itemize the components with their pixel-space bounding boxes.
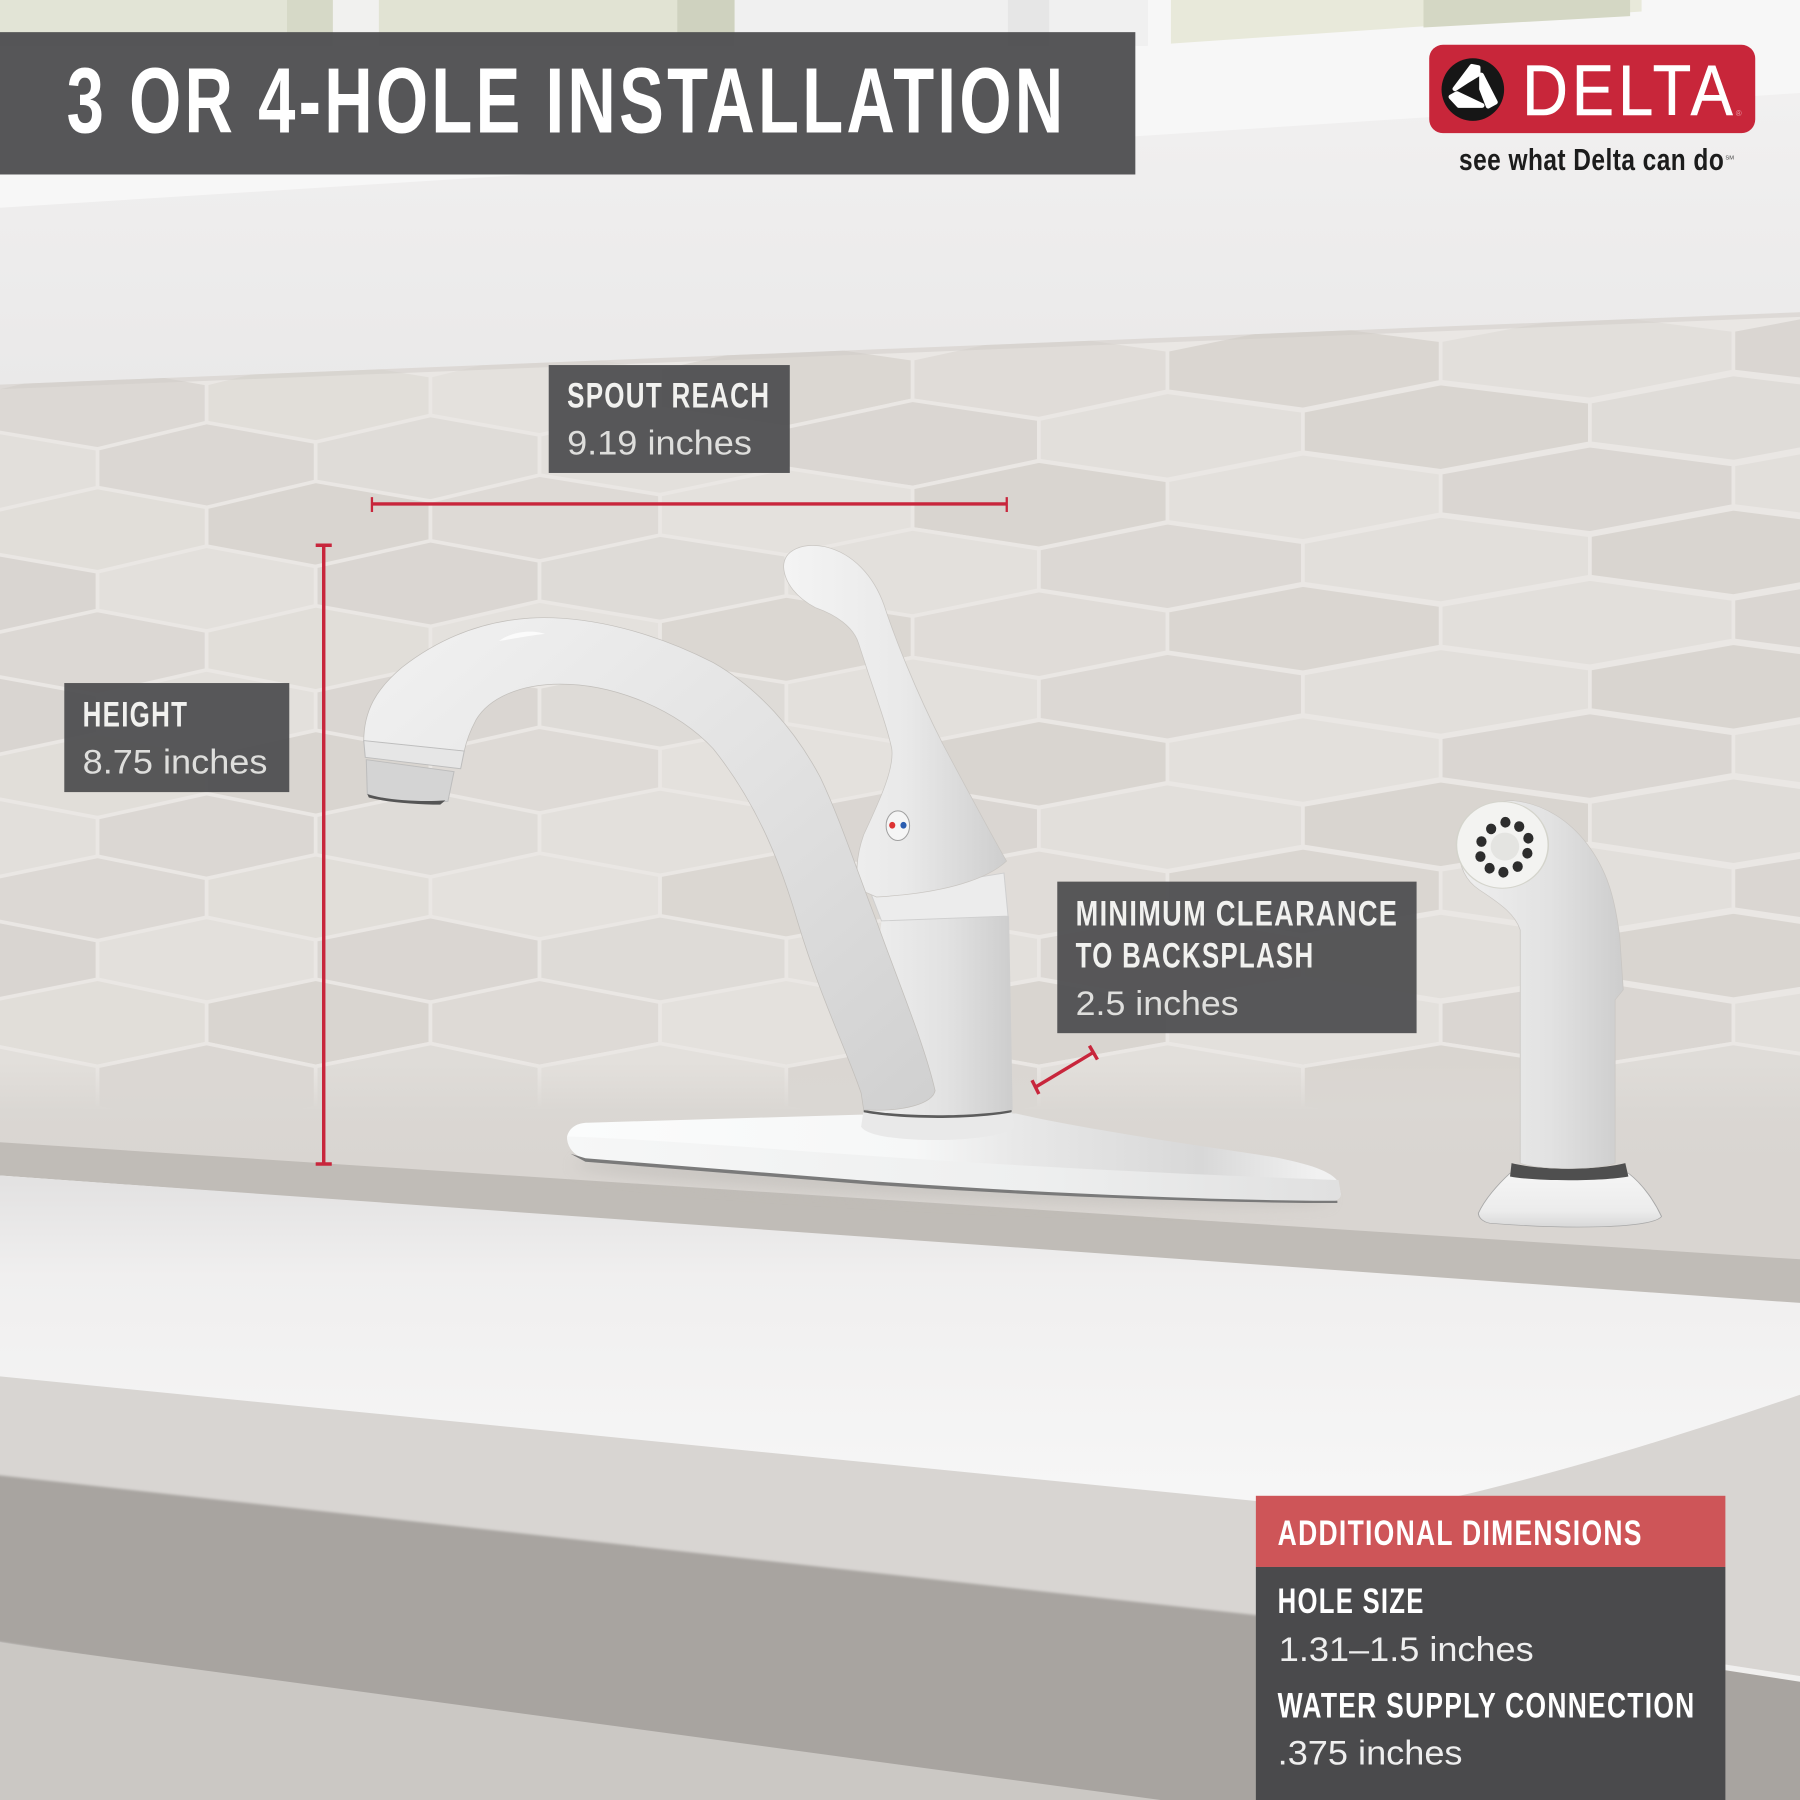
panel: additional dimensions	[1256, 1496, 1725, 1800]
deck plate shadow	[574, 1149, 1332, 1216]
callout: height	[64, 683, 289, 792]
background: window and white wall above	[0, 0, 1800, 390]
faucet	[364, 545, 1341, 1216]
nozzle ring	[364, 741, 464, 769]
clearance value: 2.5 inches	[1076, 985, 1239, 1023]
hole size label: HOLE SIZE	[1278, 1581, 1425, 1621]
logo badge	[1429, 45, 1755, 133]
clearance label line 2: TO BACKSPLASH	[1076, 936, 1314, 976]
faucet parts in zoom coordinates	[364, 545, 1014, 1140]
sprayer body	[1459, 801, 1623, 1169]
clearance label line 1: MINIMUM CLEARANCE	[1076, 893, 1398, 933]
black ring	[1510, 1163, 1628, 1180]
kitchen countertop surface	[0, 1062, 1800, 1263]
background: white fascia under the window	[0, 93, 1800, 385]
side sprayer	[1456, 801, 1662, 1227]
hot and cold indicator	[886, 811, 910, 841]
registered mark: ®	[1736, 109, 1742, 118]
deck plate top	[567, 1114, 1341, 1202]
dimension line: spout reach	[372, 497, 1007, 512]
panel header	[1256, 1496, 1725, 1567]
spout highlight	[499, 632, 545, 641]
white sink	[0, 1176, 1800, 1561]
body cylinder	[864, 916, 1013, 1115]
hole size value: 1.31–1.5 inches	[1279, 1631, 1534, 1669]
lower counter top	[0, 1376, 1800, 1688]
spray face	[1456, 802, 1548, 888]
panel heading: ADDITIONAL DIMENSIONS	[1278, 1513, 1643, 1553]
panel body	[1256, 1567, 1725, 1800]
deck plate underside	[571, 1154, 1337, 1203]
water supply value: .375 inches	[1278, 1734, 1462, 1772]
aerator	[366, 760, 454, 802]
callout: spout reach	[549, 365, 790, 473]
backsplash tile wall	[0, 230, 1800, 1159]
collar	[871, 873, 1008, 921]
logo wordmark: DELTA	[1522, 52, 1737, 131]
logo emblem	[1442, 58, 1504, 121]
title banner	[0, 32, 1135, 174]
service mark: SM	[1725, 156, 1734, 162]
fascia shadow line	[0, 312, 1800, 389]
height label: HEIGHT	[83, 695, 188, 735]
spray center nub	[1491, 833, 1519, 861]
lower counter front edge	[0, 1473, 1800, 1800]
callout: minimum clearance	[1057, 882, 1417, 1033]
spout reach value: 9.19 inches	[567, 425, 752, 463]
tagline: see what Delta can do	[1459, 142, 1724, 177]
sprayer base	[1478, 1173, 1662, 1227]
spout tube	[364, 618, 935, 1110]
hub ring	[864, 1108, 1012, 1118]
deck plate front face	[567, 1136, 1341, 1202]
hub base	[861, 1110, 1014, 1140]
dimension line: height	[316, 545, 332, 1164]
height value: 8.75 inches	[83, 744, 267, 782]
aerator mouth	[367, 794, 445, 805]
countertop front edge	[0, 1142, 1800, 1305]
lower cabinet front	[0, 1643, 1161, 1800]
dimension line: minimum clearance	[1032, 1046, 1097, 1094]
Delta logo	[1429, 45, 1755, 177]
title text: 3 OR 4-HOLE INSTALLATION	[67, 49, 1066, 153]
spray nozzles	[1475, 817, 1533, 878]
hot dot	[889, 822, 895, 829]
edge highlight	[1725, 1665, 1800, 1682]
cold dot	[900, 822, 907, 829]
spout reach label: SPOUT REACH	[567, 376, 770, 416]
handle	[784, 545, 1007, 897]
